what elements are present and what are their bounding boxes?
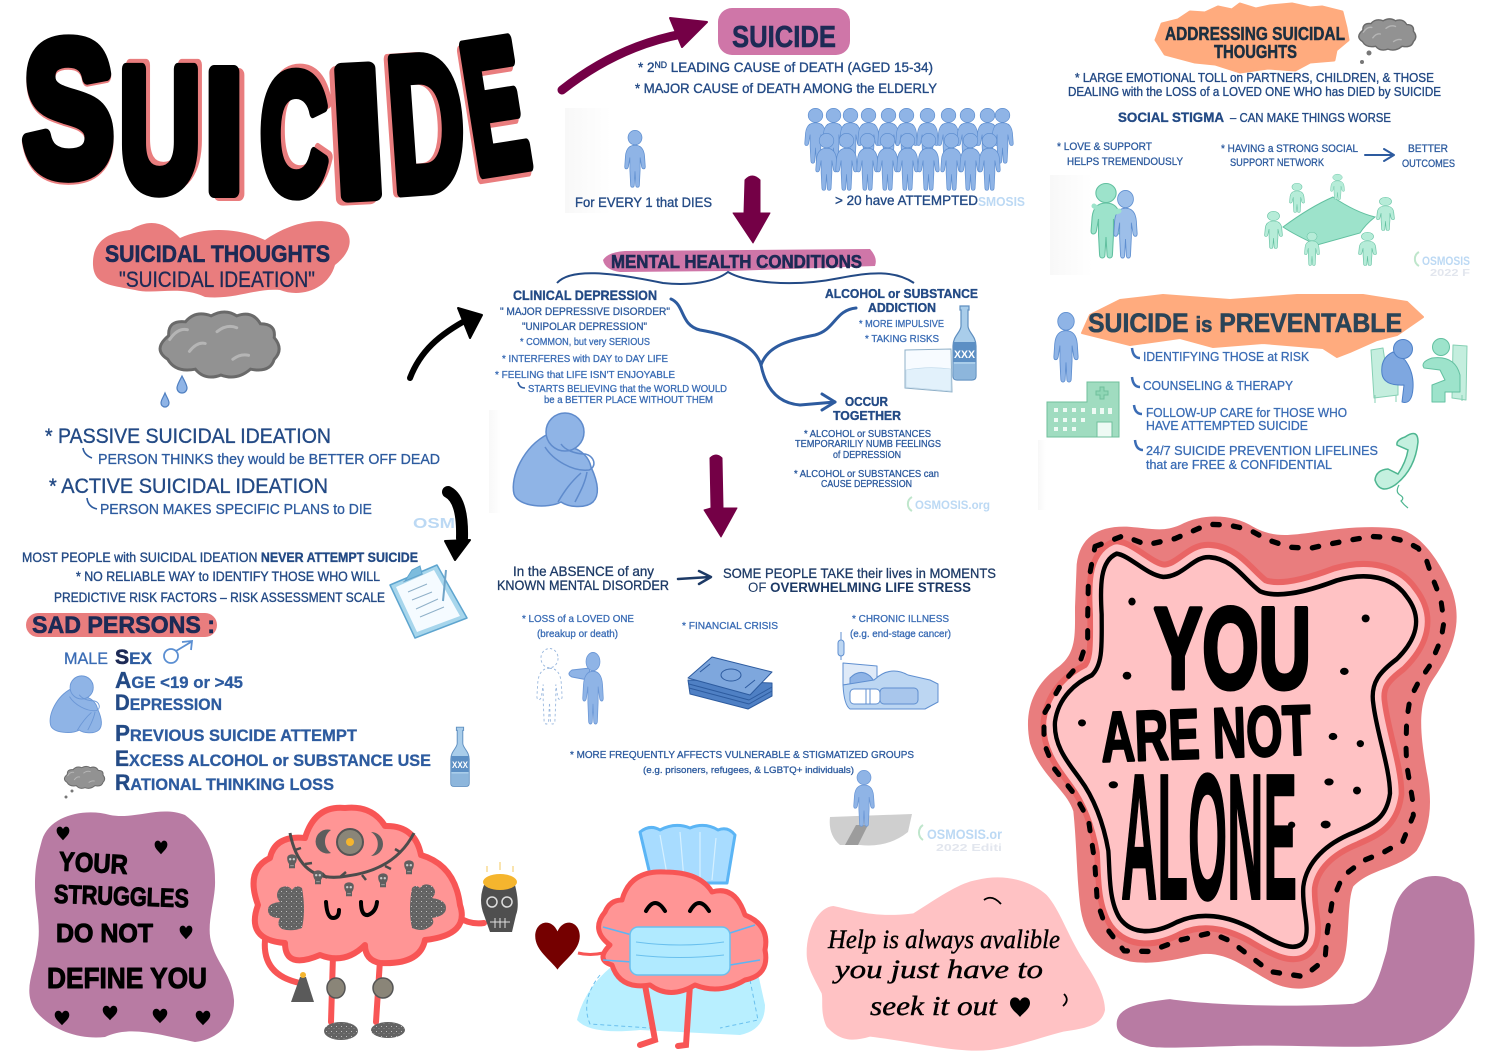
skull cup xyxy=(481,862,518,932)
title letters: U xyxy=(119,32,201,228)
title letter shadows: I xyxy=(210,37,248,231)
subheading text: "SUICIDAL IDEATION" xyxy=(119,267,315,292)
heading xyxy=(1082,295,1423,357)
for every 1 label: For EVERY 1 that DIES xyxy=(575,194,712,210)
connector arrows xyxy=(671,299,856,410)
icon: support network sheet xyxy=(1265,174,1394,266)
handwritten message xyxy=(827,925,1060,1021)
title letters: I xyxy=(327,28,389,235)
title letters xyxy=(23,1,540,235)
character: masked brain with heart xyxy=(535,825,766,1046)
icon: hospital bed xyxy=(838,632,938,709)
brain body xyxy=(254,808,462,963)
leading cause line: * 2 xyxy=(638,59,655,75)
watermark: 2022 Editi xyxy=(936,843,1002,854)
clinical depression details: * INTERFERES with DAY to DAY LIFE xyxy=(502,353,668,365)
wings xyxy=(268,884,446,930)
elderly line: * MAJOR CAUSE of DEATH AMONG the ELDERLY xyxy=(635,80,938,96)
arrow: black down to risk factors xyxy=(445,492,470,560)
watermark: OSMOSIS.org xyxy=(915,498,990,512)
heading blob xyxy=(93,221,350,297)
panel: addressing suicidal thoughts xyxy=(1050,4,1475,279)
face xyxy=(326,902,377,918)
icon: clipboard xyxy=(390,565,467,638)
icon: curled person xyxy=(513,413,597,507)
heading: suicide xyxy=(718,8,850,55)
arm xyxy=(578,953,603,954)
stress text: SOME PEOPLE TAKE their lives in MOMENTS xyxy=(723,565,996,581)
arrow to outcomes xyxy=(1365,149,1394,161)
social network text: * HAVING a STRONG SOCIAL xyxy=(1221,143,1358,155)
boots xyxy=(324,1022,405,1040)
icon: two people hugging xyxy=(1091,184,1137,258)
icon: small bottle xyxy=(451,727,469,786)
social stigma text xyxy=(1118,109,1391,125)
brain body xyxy=(599,872,766,992)
heading: mental health conditions: MENTAL HEALTH CONDITIONS xyxy=(611,252,862,272)
emotional toll text xyxy=(1068,70,1441,99)
love and support text xyxy=(1057,141,1184,168)
title letter shadows: E xyxy=(448,6,538,218)
title letters: C xyxy=(260,39,328,230)
watermark xyxy=(919,825,1002,854)
moons and disc xyxy=(316,829,383,856)
icon: small bottle: XXX xyxy=(452,760,468,770)
text: YOU: YOU xyxy=(1154,585,1311,713)
heading: SAD PERSONS: SAD PERSONS : xyxy=(32,612,215,639)
message: YOUR xyxy=(58,846,129,880)
clinical depression details: STARTS BELIEVING that the WORLD WOULD xyxy=(528,383,727,395)
message xyxy=(47,846,207,995)
watermark: osmosis left: OSM xyxy=(413,515,455,532)
heading xyxy=(1156,4,1348,72)
flask xyxy=(291,972,314,1002)
decoration: purple swoosh xyxy=(1117,876,1475,1048)
heading: THOUGHTS xyxy=(1214,42,1297,62)
financial crisis: * FINANCIAL CRISIS xyxy=(682,620,778,632)
male sex: MALE xyxy=(64,649,108,668)
icon: small thought cloud xyxy=(64,766,105,798)
handwritten message: you just have to xyxy=(831,955,1043,984)
hat xyxy=(640,825,735,883)
never attempt line: MOST PEOPLE with SUICIDAL IDEATION NEVER ATTEMPT SUICIDE xyxy=(22,550,418,565)
icon: single person xyxy=(625,130,645,187)
stress text xyxy=(723,565,996,595)
title letter shadows: D xyxy=(377,13,468,233)
icon: substance bag xyxy=(905,349,952,392)
more frequently text: * MORE FREQUENTLY AFFECTS VULNERABLE & STIGMATIZED GROUPS xyxy=(570,749,914,761)
legs and feet xyxy=(640,985,690,1046)
panel: suicidal thoughts heading xyxy=(93,221,350,297)
leading cause line: ND xyxy=(655,60,668,70)
blob layers xyxy=(1028,516,1457,989)
text: ARE NOT: ARE NOT xyxy=(1100,691,1312,778)
sticker: help is always available xyxy=(807,877,1105,1051)
icon: bottle: XXX xyxy=(954,349,976,361)
absence text: KNOWN MENTAL DISORDER xyxy=(497,577,669,593)
sticker: you are not alone xyxy=(1028,516,1457,989)
chronic illness: * CHRONIC ILLNESS xyxy=(852,613,949,625)
heading: SUICIDE is PREVENTABLE xyxy=(1088,308,1402,338)
social stigma text: – CAN MAKE THINGS WORSE xyxy=(1230,110,1391,125)
mask xyxy=(603,925,760,975)
absence text xyxy=(497,563,669,593)
title letter shadows xyxy=(23,5,538,238)
occur together details: * ALCOHOL or SUBSTANCES xyxy=(804,429,931,440)
arrow xyxy=(678,571,711,584)
occur together details: * ALCOHOL or SUBSTANCES can xyxy=(794,469,939,480)
cape xyxy=(577,960,765,1035)
list: prevention measures: COUNSELING & THERAPY xyxy=(1143,378,1293,393)
alcohol heading xyxy=(825,286,978,315)
character: witchy brain xyxy=(254,808,518,1040)
emotional toll text: * LARGE EMOTIONAL TOLL on PARTNERS, CHILDREN, & THOSE xyxy=(1075,70,1434,85)
title letters: D xyxy=(381,13,472,233)
rational thinking: RATIONAL THINKING LOSS xyxy=(115,770,334,795)
list: prevention measures xyxy=(1132,348,1378,472)
icon: crowd of people xyxy=(805,108,1013,190)
love and support text: HELPS TREMENDOUSLY xyxy=(1067,156,1184,168)
eyes xyxy=(646,903,709,911)
decorative marks xyxy=(984,898,1067,1006)
watermark: OSMOSIS.or xyxy=(927,826,1002,842)
occur together heading: OCCUR xyxy=(845,394,889,409)
limbs xyxy=(265,917,484,1022)
social network text xyxy=(1221,143,1358,169)
loss of loved one: (breakup or death) xyxy=(537,628,618,640)
attempted label: > 20 have ATTEMPTED xyxy=(835,192,978,208)
absence text: In the ABSENCE of any xyxy=(513,563,654,579)
leading cause line: LEADING CAUSE of DEATH (AGED 15-34) xyxy=(667,59,933,75)
panel: mental health conditions xyxy=(489,249,990,513)
heading text: SUICIDAL THOUGHTS xyxy=(105,241,330,268)
occur together details xyxy=(794,429,941,490)
icon: hospital xyxy=(1047,382,1119,437)
watermark: 2022 F xyxy=(1430,268,1470,279)
icon: hearts xyxy=(55,827,210,1025)
depression: DEPRESSION xyxy=(115,690,222,715)
icon: small curled person xyxy=(50,676,101,733)
title letter shadows: U xyxy=(123,28,205,224)
arrow: black curved to mental health xyxy=(410,308,482,378)
title letter shadows: S xyxy=(23,5,114,217)
watermark xyxy=(1415,252,1470,279)
previous attempt: PREVIOUS SUICIDE ATTEMPT xyxy=(115,720,358,746)
icon: person on cliff edge xyxy=(830,770,912,845)
clinical depression details: "UNIPOLAR DEPRESSION" xyxy=(522,321,647,333)
age: AGE <19 or >45 xyxy=(115,667,243,693)
list: prevention measures: FOLLOW-UP CARE for THOSE WHO xyxy=(1146,405,1347,420)
alcohol heading: ALCOHOL or SUBSTANCE xyxy=(825,286,978,301)
occur together details: TEMPORARILIY NUMB FEELINGS xyxy=(795,439,941,450)
alcohol details: * MORE IMPULSIVE xyxy=(859,318,944,330)
list: SAD PERSONS mnemonic xyxy=(64,641,431,795)
icon: person xyxy=(1054,312,1078,382)
title letter shadows: I xyxy=(322,31,385,238)
title letter shadows: C xyxy=(264,35,332,226)
passive heading: * PASSIVE SUICIDAL IDEATION xyxy=(45,425,331,448)
active heading: * ACTIVE SUICIDAL IDEATION xyxy=(49,475,328,498)
outcomes text: OUTCOMES xyxy=(1402,158,1455,170)
social stigma text: SOCIAL STIGMA xyxy=(1118,109,1224,125)
icon: storm cloud with drops xyxy=(160,312,279,407)
love and support text: * LOVE & SUPPORT xyxy=(1057,141,1152,153)
handwritten message: seek it out xyxy=(870,991,999,1021)
garland with skulls xyxy=(287,833,414,896)
clinical depression details: be a BETTER PLACE WITHOUT THEM xyxy=(544,395,713,406)
icon: thought cloud xyxy=(1359,19,1416,64)
occur together details: of DEPRESSION xyxy=(833,450,901,461)
clinical depression details: " MAJOR DEPRESSIVE DISORDER" xyxy=(500,306,670,318)
blob xyxy=(807,877,1105,1051)
handwritten message: Help is always avalible xyxy=(827,925,1060,954)
heading: ADDRESSING SUICIDAL xyxy=(1165,24,1345,44)
outcomes text: BETTER xyxy=(1408,143,1448,155)
brace xyxy=(557,272,914,284)
list: prevention measures: 24/7 SUICIDE PREVENTION LIFELINES xyxy=(1146,443,1378,458)
more frequently text xyxy=(570,749,914,776)
title letters: S xyxy=(23,3,114,215)
icon: heart xyxy=(1010,997,1030,1017)
social network text: SUPPORT NETWORK xyxy=(1230,157,1325,169)
panel: absence of mental disorder xyxy=(497,563,1002,854)
loss of loved one: * LOSS of a LOVED ONE xyxy=(522,613,634,625)
arrow: maroon down to mental health xyxy=(733,176,770,243)
icon: counseling session xyxy=(1371,338,1467,403)
message: DO NOT xyxy=(56,918,153,948)
icon: telephone xyxy=(1375,433,1418,508)
arrow: maroon to suicide heading xyxy=(562,18,707,90)
male sex xyxy=(64,646,153,669)
watermark: SMOSIS xyxy=(978,194,1025,209)
alcohol details: * TAKING RISKS xyxy=(865,333,939,345)
list: prevention measures: HAVE ATTEMPTED SUICIDE xyxy=(1146,418,1308,433)
message: STRUGGLES xyxy=(53,879,189,913)
arrow: maroon down to stress xyxy=(704,455,737,537)
active description: PERSON MAKES SPECIFIC PLANS to DIE xyxy=(100,501,372,518)
clinical depression heading: CLINICAL DEPRESSION xyxy=(513,287,657,303)
list: prevention measures: IDENTIFYING THOSE at RISK xyxy=(1143,349,1309,364)
heart xyxy=(535,923,580,970)
list: prevention measures: that are FREE & CONFIDENTIAL xyxy=(1146,457,1332,472)
icon: male symbol xyxy=(164,641,192,663)
clinical depression details: * FEELING that LIFE ISN'T ENJOYABLE xyxy=(495,369,675,381)
risk factors line: PREDICTIVE RISK FACTORS – RISK ASSESSMENT SCALE xyxy=(54,590,385,605)
occur together heading xyxy=(833,394,902,423)
watermark: OSMOSIS xyxy=(1422,254,1470,268)
icon: absent figure and person xyxy=(537,649,603,724)
panel: suicide is preventable xyxy=(1038,295,1467,510)
passive description: PERSON THINKS they would be BETTER OFF DEAD xyxy=(98,451,440,468)
outcomes text xyxy=(1402,143,1455,170)
icon: stack of money xyxy=(688,657,772,709)
chronic illness xyxy=(850,613,951,640)
panel: ideation types xyxy=(45,425,440,518)
occur together heading: TOGETHER xyxy=(833,408,902,423)
title letters: I xyxy=(205,34,243,228)
occur together details: CAUSE DEPRESSION xyxy=(821,479,912,490)
alcohol heading: ADDICTION xyxy=(868,300,936,315)
excess alcohol: EXCESS ALCOHOL or SUBSTANCE USE xyxy=(115,746,431,771)
heading: suicide: SUICIDE xyxy=(732,19,836,54)
no reliable way line: * NO RELIABLE WAY to IDENTIFY THOSE WHO WILL xyxy=(76,569,380,584)
clinical depression details xyxy=(495,306,727,406)
loss of loved one xyxy=(522,613,634,640)
chronic illness: (e.g. end-stage cancer) xyxy=(850,629,951,640)
stress text: OF OVERWHELMING LIFE STRESS xyxy=(748,579,971,595)
male sex: SEX xyxy=(115,646,153,669)
knee discs xyxy=(327,978,393,998)
alcohol details xyxy=(859,318,944,345)
title: SUICIDE xyxy=(23,1,540,238)
icon: bottle xyxy=(953,306,976,380)
more frequently text: (e.g. prisoners, refugees, & LGBTQ+ individuals) xyxy=(643,765,854,776)
text block: risk facts xyxy=(22,550,418,605)
emotional toll text: DEALING with the LOSS of a LOVED ONE WHO has DIED by SUICIDE xyxy=(1068,84,1441,99)
message: DEFINE YOU xyxy=(47,963,207,995)
blob xyxy=(29,811,234,1042)
clinical depression details: * COMMON, but very SERIOUS xyxy=(520,336,650,348)
panel: suicide statistics xyxy=(562,8,1025,213)
sticker: your struggles do not define you xyxy=(29,811,234,1042)
